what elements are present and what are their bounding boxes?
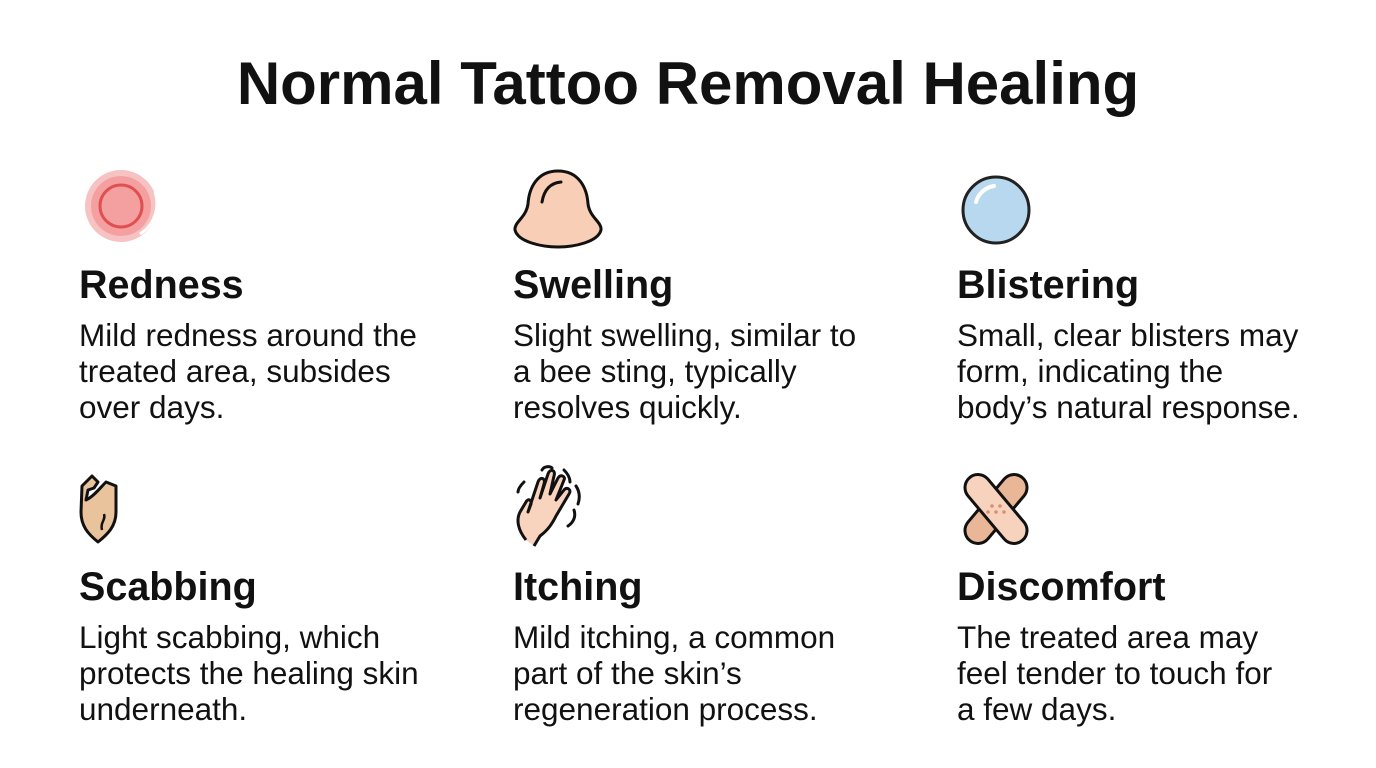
panel: itching: Mild itching, a common: [513, 619, 835, 655]
panel: scabbing: underneath.: [79, 691, 247, 727]
panel: blistering: [957, 263, 1300, 425]
icon: swelling: [514, 170, 602, 248]
panel: discomfort: a few days.: [957, 691, 1116, 727]
panel: redness: over days.: [79, 389, 224, 425]
panel: itching: part of the skin’s: [513, 655, 742, 691]
panel: redness: Mild redness around the: [79, 317, 417, 353]
panel: scabbing: protects the healing skin: [79, 655, 419, 691]
icon: itching hand: [516, 465, 581, 547]
panel: swelling: [513, 263, 856, 425]
panel: scabbing: Scabbing: [79, 565, 257, 609]
panel: blistering: Blistering: [957, 263, 1139, 307]
panel: itching: [513, 565, 835, 727]
title: Normal Tattoo Removal Healing: [237, 50, 1139, 117]
icon: redness: [85, 170, 156, 242]
panel: discomfort: Discomfort: [957, 565, 1166, 609]
panel: scabbing: [79, 565, 419, 727]
panel: blistering: body’s natural response.: [957, 389, 1300, 425]
panel: scabbing: Light scabbing, which: [79, 619, 380, 655]
panel: redness: Redness: [79, 263, 244, 307]
panel: discomfort: feel tender to touch for: [957, 655, 1272, 691]
panel: swelling: resolves quickly.: [513, 389, 742, 425]
panel: itching: Itching: [513, 565, 642, 609]
panel: redness: [79, 263, 417, 425]
icon: scab: [80, 474, 118, 544]
panel: blistering: form, indicating the: [957, 353, 1223, 389]
panel: swelling: Swelling: [513, 263, 673, 307]
panel: redness: treated area, subsides: [79, 353, 391, 389]
icon: blister: [962, 176, 1030, 244]
panel: itching: regeneration process.: [513, 691, 818, 727]
icon: bandage: [964, 473, 1028, 545]
panel: swelling: a bee sting, typically: [513, 353, 797, 389]
panel: discomfort: [957, 565, 1272, 727]
panel: discomfort: The treated area may: [957, 619, 1258, 655]
panel: swelling: Slight swelling, similar to: [513, 317, 856, 353]
panel: blistering: Small, clear blisters may: [957, 317, 1298, 353]
